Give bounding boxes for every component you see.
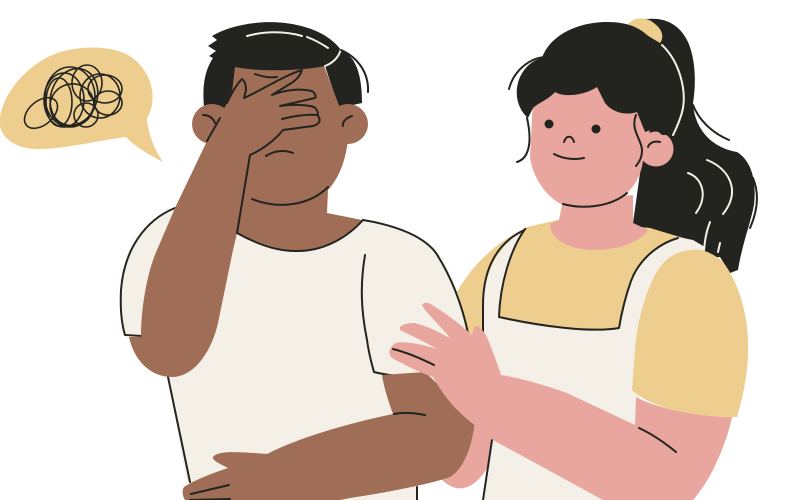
- apron bib: [499, 220, 678, 330]
- back arm: [438, 420, 498, 488]
- hair: [517, 22, 672, 135]
- sleeve: [632, 250, 748, 417]
- shirt: [121, 208, 470, 500]
- ear: [638, 132, 674, 166]
- bib outline: [499, 229, 678, 330]
- speech bubble with scribble: [0, 47, 163, 162]
- arm: [389, 303, 732, 500]
- hair strokes: [247, 32, 341, 66]
- face and neck: [225, 66, 362, 251]
- top hair: [208, 22, 341, 80]
- man: [121, 22, 475, 500]
- neck: [550, 195, 648, 250]
- ears: [192, 104, 232, 144]
- back hair: [203, 50, 362, 110]
- woman: [438, 18, 757, 500]
- woman front arm and hand: [389, 250, 748, 500]
- shirt outlines: [121, 208, 468, 500]
- arm lines: [393, 349, 676, 452]
- raised arm and hand: [129, 70, 320, 377]
- hand lines: [203, 70, 352, 233]
- scribble: [19, 62, 122, 134]
- apron: [483, 228, 705, 500]
- hair lines: [509, 57, 757, 228]
- apron outline: [483, 229, 527, 500]
- face: [530, 70, 650, 207]
- collar line: [237, 220, 363, 251]
- hair band: [628, 18, 662, 43]
- ponytail: [633, 19, 755, 273]
- yellow shirt: [440, 220, 690, 345]
- lower arm lines: [190, 413, 425, 500]
- eyes and features: [544, 120, 660, 207]
- hair highlights: [662, 45, 732, 252]
- lower arm: [183, 372, 475, 500]
